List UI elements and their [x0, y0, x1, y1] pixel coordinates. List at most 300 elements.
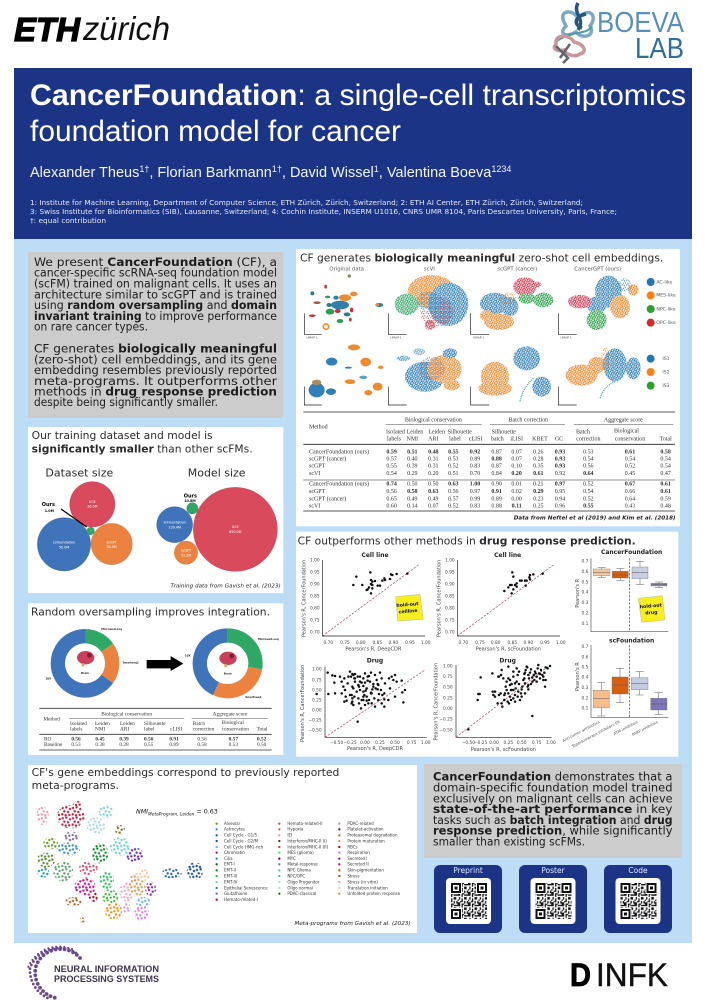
- authors: Alexander Theus: [30, 165, 139, 181]
- legend: Secreted I: [347, 856, 368, 861]
- chart: cell line vs DeepCDR: 0.90: [389, 640, 398, 646]
- table: oversampling metrics: correction: [193, 727, 215, 733]
- QR card: Preprint: [434, 865, 502, 933]
- legend: Protein maturation: [347, 838, 385, 843]
- chart: drug vs DeepCDR: [300, 657, 431, 752]
- chart: cell line vs scFoundation: 0.90: [445, 582, 455, 588]
- chart: drug vs DeepCDR: 1.00: [421, 740, 431, 746]
- table rows: first dataset: 0.55: [448, 449, 459, 455]
- panel: conclusion: exclusively on malignant cells can achieve: [433, 792, 673, 805]
- table rows: first dataset: 0.52: [448, 464, 459, 470]
- panel: introduction: cancer-specific scRNA-seq foundation model: [34, 267, 277, 280]
- table rows: second dataset: 0.97: [470, 489, 480, 495]
- table rows: first dataset: 0.64: [583, 471, 594, 477]
- table: integration metrics: Biological: [614, 428, 639, 434]
- affiliations: †: equal contribution: [30, 217, 106, 225]
- legend: Alveolar: [224, 821, 241, 826]
- table rows: second dataset: 0.63: [448, 482, 459, 488]
- chart: drug vs DeepCDR: 0.75: [407, 740, 417, 746]
- affiliations: 1: Institute for Machine Learning, Department of Computer Science, ETH Zürich, Zürich, Switzerland; 2: ETH AI Center, ETH Zürich, Zürich, Switzerland;: [30, 199, 583, 207]
- chart: donut before: [45, 627, 139, 690]
- table: oversampling metrics: Leiden: [120, 721, 135, 727]
- table rows: second dataset: 1.00: [470, 482, 480, 488]
- chart: drug vs DeepCDR: 1.00: [312, 667, 322, 673]
- chart: cell line vs scFoundation: 0.95: [445, 570, 455, 576]
- legend: Hemato-related-II: [287, 821, 323, 826]
- table: integration metrics: Silhouette: [448, 430, 472, 436]
- chart: box plot scFoundation: 0.1: [581, 706, 589, 712]
- table rows: second dataset: 0.14: [407, 504, 418, 510]
- table rows: second dataset: 0.97: [555, 482, 565, 488]
- chart: model size bubbles: 650.0M: [229, 530, 242, 534]
- header banner: [14, 68, 692, 239]
- sticky note: hold-out cellline: cellline: [398, 608, 418, 616]
- table rows: first dataset: 0.93: [555, 457, 565, 463]
- authors: 1: [374, 164, 379, 174]
- chart: box plot scFoundation: 0.5: [581, 664, 589, 670]
- legend: Cell Cycle - G1/S: [224, 833, 258, 838]
- chart: box plot scFoundation: Topoisomerase inhibitors I/II: [570, 719, 620, 749]
- table rows: second dataset: 0.61: [660, 489, 671, 495]
- chart: cell line vs scFoundation: 0.85: [508, 640, 517, 646]
- table rows: first dataset: 0.07: [511, 449, 522, 455]
- legend: Unfolded protein response: [347, 891, 401, 896]
- chart: dataset size bubbles: 36.0M: [87, 505, 98, 509]
- table rows: second dataset: 0.49: [428, 496, 439, 502]
- chart: box plot scFoundation: PARP inhibitors: [631, 719, 659, 737]
- chart: dataset size bubbles: [37, 467, 132, 571]
- panel: conclusion: domain-specific foundation model trained: [433, 782, 672, 794]
- logo: NeurIPS: PROCESSING SYSTEMS: [54, 974, 159, 985]
- chart: box plot scFoundation: 0.7: [581, 644, 589, 650]
- heading: meta-programs.: [32, 780, 119, 792]
- table: oversampling metrics: 0.53: [229, 742, 238, 748]
- chart: drug vs scFoundation: 0.00: [489, 740, 499, 746]
- table: integration metrics: batch: [491, 437, 504, 443]
- legend: Interferon/MHC-II (I): [287, 838, 327, 843]
- table rows: first dataset: CancerFoundation (ours): [309, 448, 369, 455]
- table rows: second dataset: 0.90: [491, 482, 502, 488]
- arrow: [147, 656, 183, 671]
- table rows: second dataset: 0.63: [428, 489, 439, 495]
- panel: introduction: We present CancerFoundation (CF), a: [34, 256, 277, 269]
- legend: IEI: [287, 833, 292, 838]
- legend: EMT-III: [224, 873, 237, 878]
- table: integration metrics: Silhouette: [492, 430, 516, 436]
- table rows: first dataset: 0.61: [625, 449, 635, 455]
- panel: introduction: despite being significantly smaller.: [34, 396, 218, 409]
- panel: conclusion: state-of-the-art performance in key: [433, 803, 673, 816]
- table: oversampling metrics: ARI: [120, 727, 129, 733]
- table rows: second dataset: 0.52: [583, 482, 594, 488]
- panel: cell embeddings: [296, 249, 680, 526]
- table: integration metrics: labels: [387, 437, 402, 443]
- table: integration metrics: correction: [576, 437, 600, 443]
- chart: box plot CancerFoundation: [575, 549, 668, 632]
- sticky note: hold-out cellline: hold-out: [396, 601, 420, 609]
- table rows: first dataset: 0.92: [555, 471, 565, 477]
- chart: dataset size bubbles: UCE: [89, 500, 96, 504]
- panel: conclusion: tasks such as batch integration and drug: [433, 814, 672, 827]
- chart: box plot scFoundation: 0.2: [581, 695, 589, 701]
- table rows: first dataset: 0.07: [511, 457, 522, 463]
- chart: drug vs scFoundation: 0.50: [517, 740, 527, 746]
- table: integration metrics: label: [449, 437, 461, 443]
- table rows: first dataset: 0.93: [555, 449, 565, 455]
- chart: model size bubbles: 10.8M: [184, 499, 196, 503]
- chart: drug vs scFoundation: 1.00: [546, 740, 556, 746]
- panel: introduction: architecture similar to scGPT and is trained: [34, 288, 277, 301]
- authors: 1234: [491, 164, 511, 174]
- heading: CF generates biologically meaningful zero-shot cell embeddings.: [300, 252, 663, 265]
- title: CancerFoundation: a single-cell transcriptomics: [30, 79, 686, 112]
- panel: introduction: on rare cancer types.: [34, 321, 148, 334]
- chart: box plot scFoundation: Pearson's R: [575, 662, 581, 691]
- logo: NeurIPS: NEURAL INFORMATION: [54, 964, 159, 975]
- chart: cell line vs DeepCDR: 0.70: [324, 640, 333, 646]
- chart: cell line vs DeepCDR: 0.70: [310, 630, 320, 636]
- table rows: second dataset: 0.48: [660, 504, 671, 510]
- chart: drug vs scFoundation: 0.50: [443, 685, 453, 691]
- table rows: second dataset: 0.11: [512, 504, 522, 510]
- chart: donut before: Brain: [81, 671, 89, 675]
- chart: drug vs DeepCDR: −0.25: [308, 718, 322, 724]
- table rows: first dataset: 0.26: [533, 449, 544, 455]
- authors: 1†: [139, 164, 149, 174]
- chart: drug vs scFoundation: Pearson's R, scFoundation: [471, 747, 536, 753]
- table: oversampling metrics: Batch: [193, 721, 205, 727]
- chart: dataset size bubbles: scFoundation: [53, 541, 75, 545]
- logo: NeurIPS: [27, 947, 159, 999]
- legend: cell types: [647, 278, 676, 327]
- legend: EMT-I: [224, 862, 235, 867]
- chart: cell line vs DeepCDR: 0.80: [356, 640, 366, 646]
- QR card: Poster: [519, 865, 587, 933]
- legend: Epithelial Senescence: [224, 885, 268, 890]
- chart: cell line vs scFoundation: 1.00: [445, 558, 455, 564]
- chart: drug vs scFoundation: Pearson's R, CancerFoundation: [433, 663, 439, 740]
- legend: Hypoxia: [287, 827, 304, 832]
- table rows: first dataset: [309, 448, 671, 477]
- table rows: second dataset: 0.66: [625, 489, 635, 495]
- table rows: first dataset: 0.52: [625, 464, 635, 470]
- chart: cell line vs DeepCDR: 0.80: [310, 606, 320, 612]
- legend: [215, 821, 401, 902]
- table rows: second dataset: 0.59: [660, 496, 671, 502]
- legend: cell types: AC-like: [656, 279, 672, 285]
- panel: conclusion: smaller than existing scFMs.: [433, 836, 585, 848]
- umap column titles: Original data: [329, 267, 364, 273]
- umap column titles: CancerGPT (ours): [574, 267, 621, 273]
- chart: box plot CancerFoundation: 0.1: [581, 621, 589, 627]
- table rows: second dataset: 0.91: [491, 489, 502, 495]
- table: integration metrics: GC: [555, 437, 563, 443]
- chart: cell line vs scFoundation: Pearson's R, CancerFoundation: [437, 560, 443, 637]
- legend: Platelet-activation: [347, 827, 384, 832]
- table rows: first dataset: 0.47: [660, 471, 671, 477]
- chart: box plot CancerFoundation: 0.7: [581, 558, 589, 564]
- chart: drug vs DeepCDR: Pearson's R, DeepCDR: [347, 746, 403, 752]
- table: oversampling metrics: 0.39: [119, 736, 129, 742]
- table rows: first dataset: 0.55: [386, 464, 397, 470]
- QR card: Poster: Poster: [541, 866, 566, 875]
- panel: dataset and model size: [28, 427, 283, 593]
- table: oversampling metrics: Total: [257, 727, 268, 733]
- table: oversampling metrics: cLISI: [170, 727, 182, 733]
- title: foundation model for cancer: [30, 115, 401, 148]
- chart: box plot scFoundation: 0.6: [581, 654, 589, 660]
- chart: dataset size bubbles: 30.0M: [107, 545, 117, 549]
- chart: drug vs DeepCDR: 0.50: [390, 740, 400, 746]
- chart: box plot CancerFoundation: 0.5: [581, 579, 589, 585]
- authors: , Florian Barkmann: [149, 165, 272, 181]
- legend: cell types: OPC-like: [656, 320, 676, 326]
- table rows: second dataset: 0.21: [533, 482, 544, 488]
- chart: cell line vs DeepCDR: 0.95: [405, 640, 415, 646]
- table: integration metrics: Method: [309, 424, 328, 430]
- chart: cell line vs DeepCDR: 0.75: [310, 618, 320, 624]
- chart: model size bubbles: UCE: [232, 525, 239, 529]
- table: integration metrics: Leiden: [428, 430, 445, 436]
- table rows: first dataset: scGPT: [309, 464, 326, 470]
- chart: cell line vs DeepCDR: 0.85: [310, 594, 320, 600]
- table rows: first dataset: 0.39: [407, 464, 418, 470]
- table rows: first dataset: 0.51: [407, 449, 418, 455]
- chart: donut after: Brain: [224, 672, 232, 676]
- chart: dataset size bubbles: 1.0M: [45, 509, 54, 513]
- table rows: second dataset: 0.49: [407, 496, 418, 502]
- chart: box plot CancerFoundation: Pearson's R: [575, 578, 581, 608]
- table rows: second dataset: 0.52: [448, 504, 459, 510]
- table rows: second dataset: 0.50: [428, 482, 439, 488]
- logo: D-INFK: D: [570, 957, 591, 993]
- table: oversampling metrics: Leiden: [95, 721, 110, 727]
- table rows: first dataset: 0.10: [511, 464, 522, 470]
- chart: cell line vs scFoundation: 0.70: [459, 640, 468, 646]
- chart: drug vs scFoundation: [433, 657, 556, 753]
- table: integration metrics: Total: [660, 437, 672, 443]
- chart: model size bubbles: 51.3M: [181, 553, 191, 557]
- table rows: first dataset: scGPT (cancer): [309, 456, 346, 463]
- table rows: second dataset: 0.58: [407, 489, 418, 495]
- metric label: NMI: [136, 809, 148, 816]
- table rows: first dataset: 0.45: [625, 471, 635, 477]
- chart: drug vs scFoundation: 0.00: [443, 706, 453, 712]
- table: oversampling metrics: 0.53: [71, 742, 81, 748]
- chart: dataset size bubbles: 50.0M: [59, 545, 69, 549]
- table: integration metrics: [303, 412, 675, 511]
- table rows: first dataset: 0.40: [407, 457, 418, 463]
- table rows: second dataset: scGPT: [309, 489, 326, 495]
- chart: cell line vs DeepCDR: 0.75: [340, 640, 350, 646]
- table rows: first dataset: 0.92: [470, 449, 480, 455]
- legend: datasets: IS2: [662, 369, 670, 375]
- chart: cell line vs DeepCDR: Cell line: [361, 552, 389, 559]
- legend: NPC/OPC: [287, 873, 305, 878]
- table: integration metrics: NMI: [407, 437, 418, 443]
- metric label: = 0.63: [194, 809, 218, 816]
- chart: cell line vs DeepCDR: 1.00: [310, 558, 320, 564]
- chart: drug vs DeepCDR: 0.25: [312, 698, 322, 704]
- table rows: first dataset: 0.87: [491, 464, 502, 470]
- chart: donut after: [185, 635, 279, 699]
- chart: drug vs scFoundation: 0.75: [532, 740, 542, 746]
- table: oversampling metrics: NMI: [95, 727, 106, 733]
- table: oversampling metrics: 0.58: [197, 742, 207, 748]
- table rows: second dataset: 0.94: [555, 496, 565, 502]
- table: integration metrics: iLISI: [510, 437, 523, 443]
- table rows: second dataset: 0.25: [533, 504, 544, 510]
- table rows: second dataset: 0.61: [660, 482, 671, 488]
- table: integration metrics: ARI: [428, 437, 438, 443]
- chart: umap scatter row 1: UMAP 1: [560, 335, 572, 339]
- table: oversampling metrics: conservation: [222, 727, 249, 733]
- heading: [32, 767, 339, 792]
- table: oversampling metrics: Silhouette: [144, 721, 166, 727]
- chart: cell line vs scFoundation: Pearson's R, scFoundation: [476, 646, 541, 652]
- panel: introduction: CF generates biologically meaningful: [34, 343, 277, 356]
- table rows: first dataset: 0.57: [386, 457, 397, 463]
- panel: gene embeddings: [28, 765, 417, 933]
- table rows: second dataset: CancerFoundation (ours): [309, 481, 369, 488]
- chart: dataset size bubbles: Ours: [42, 502, 55, 508]
- chart: umap scatter row 1: UMAP 1: [390, 335, 402, 339]
- chart: drug vs scFoundation: 1.00: [443, 663, 453, 669]
- chart: gene embedding scatter: [37, 801, 203, 923]
- table: oversampling metrics: 0.56: [71, 736, 81, 742]
- table rows: second dataset: 0.88: [491, 504, 502, 510]
- table rows: first dataset: 0.20: [511, 471, 522, 477]
- legend: Oligo Progenitor: [287, 879, 320, 884]
- table: oversampling metrics: Isolated: [70, 721, 87, 727]
- logo: Boeva Lab: [554, 3, 685, 65]
- table rows: first dataset: 0.54: [660, 457, 671, 463]
- chart: cell line vs scFoundation: [437, 552, 566, 652]
- authors: , David Wissel: [282, 165, 374, 181]
- panel: introduction: invariant training to improve performance: [34, 310, 277, 323]
- chart: cell line vs DeepCDR: 0.95: [310, 570, 320, 576]
- chart: umap scatter row 1: UMAP 1: [306, 335, 318, 339]
- table rows: first dataset: 0.51: [448, 471, 459, 477]
- table: oversampling metrics: 0.56: [144, 736, 154, 742]
- chart: drug vs scFoundation: Drug: [499, 657, 516, 664]
- panel: drug response: [296, 532, 678, 757]
- chart: box plot CancerFoundation: CancerFoundation: [601, 549, 662, 556]
- table: oversampling metrics: 0.38: [95, 742, 105, 748]
- legend: Secreted II: [347, 862, 369, 867]
- table rows: first dataset: 0.93: [555, 464, 565, 470]
- legend: datasets: IS1: [662, 356, 670, 362]
- chart: drug vs scFoundation: 0.75: [443, 674, 453, 680]
- table rows: second dataset: 0.83: [470, 504, 480, 510]
- chart: cell line vs DeepCDR: 0.85: [373, 640, 382, 646]
- table: oversampling metrics: 0.89: [169, 742, 179, 748]
- legend: Astrocytes: [224, 827, 245, 832]
- table rows: first dataset: 0.31: [428, 464, 439, 470]
- sticky note: hold-out cellline: [396, 594, 423, 621]
- chart: cell line vs scFoundation: 0.75: [475, 640, 485, 646]
- chart: model size bubbles: [157, 467, 277, 571]
- caption: Training data from Gavish et al. (2023): [170, 583, 281, 589]
- table rows: first dataset: 0.35: [533, 464, 544, 470]
- table rows: second dataset: 0.95: [555, 489, 565, 495]
- legend: Chromatin: [224, 850, 245, 855]
- table rows: first dataset: 0.84: [491, 471, 502, 477]
- legend: MYC: [287, 856, 296, 861]
- chart: model size bubbles: scGPT: [181, 549, 192, 553]
- chart: model size bubbles: scFoundation: [164, 521, 186, 525]
- logo: ETH Zurich: zürich: [82, 10, 170, 47]
- QR card: Preprint: Preprint: [453, 866, 483, 875]
- chart: drug vs DeepCDR: −0.50: [308, 728, 322, 734]
- table rows: second dataset: 0.23: [533, 496, 544, 502]
- table: oversampling metrics: 0.55: [144, 742, 154, 748]
- table: integration metrics: Batch correction: [508, 418, 548, 424]
- table: oversampling metrics: label: [144, 727, 155, 733]
- table rows: first dataset: 0.20: [428, 471, 439, 477]
- chart: dataset size bubbles: Dataset size: [45, 467, 113, 480]
- table rows: first dataset: 0.53: [583, 449, 594, 455]
- table rows: second dataset: 0.96: [555, 504, 565, 510]
- chart: cell line vs DeepCDR: Pearson's R, CancerFoundation: [302, 560, 308, 637]
- table rows: first dataset: 0.48: [428, 449, 439, 455]
- table rows: first dataset: 0.59: [386, 449, 397, 455]
- icon: protein helix: [554, 3, 593, 63]
- table: oversampling metrics: Biological: [222, 720, 244, 726]
- chart: box plot scFoundation: Anti-tumor antibiotics: [561, 719, 600, 743]
- sticky note: hold-out drug: drug: [645, 610, 658, 617]
- light blue poster background: [14, 239, 692, 943]
- QR card: Code: [604, 865, 672, 933]
- table rows: first dataset: 0.54: [583, 457, 594, 463]
- table rows: second dataset: 0.89: [491, 496, 502, 502]
- table: oversampling metrics: RO: [44, 736, 52, 742]
- table rows: second dataset: 0.07: [428, 504, 439, 510]
- chart: umap scatter row 1: UMAP 1: [473, 335, 485, 339]
- affiliations: 3: Swiss Institute for Bioinformatics (SIB), Lausanne, Switzerland; 4: Cochin Institute, INSERM U1016, CNRS UMR 8104, Paris Descartes University, Paris, France;: [30, 208, 617, 216]
- chart: drug vs DeepCDR: 0.50: [312, 687, 322, 693]
- panel: conclusion: response prediction , while significantly: [433, 825, 673, 838]
- chart: cell line vs DeepCDR: Pearson's R, DeepCDR: [345, 646, 402, 652]
- logo: ETH Zurich: ETH: [14, 11, 81, 48]
- legend: Cell Cycle HMG-rich: [224, 844, 264, 849]
- panel: introduction: meta-programs. It outperforms other: [34, 375, 277, 388]
- table rows: second dataset: [309, 481, 671, 510]
- chart: model size bubbles: 139.4M: [168, 525, 181, 529]
- table rows: second dataset: 0.00: [511, 496, 522, 502]
- heading: Random oversampling improves integration.: [31, 606, 270, 619]
- table: integration metrics: Aggregate score: [604, 418, 643, 424]
- legend: MES (glioma): [287, 850, 314, 855]
- authors: , Valentina Boeva: [379, 165, 492, 181]
- table: oversampling metrics: labels: [70, 727, 82, 733]
- chart: drug vs DeepCDR: 0.00: [312, 708, 322, 714]
- QR card: Code: Code: [628, 866, 648, 875]
- table rows: first dataset: 0.28: [533, 457, 544, 463]
- chart: drug vs DeepCDR: Drug: [367, 657, 383, 664]
- chart: cell line vs DeepCDR: 0.90: [310, 582, 320, 588]
- table rows: second dataset: 0.29: [533, 489, 544, 495]
- table: oversampling metrics: Method: [43, 717, 60, 723]
- legend: EMT-II: [224, 868, 236, 873]
- panel: random oversampling: [28, 603, 283, 755]
- table rows: first dataset: 0.53: [448, 457, 459, 463]
- table rows: second dataset: 0.64: [625, 496, 635, 502]
- chart: drug vs DeepCDR: −0.50: [330, 740, 344, 746]
- table rows: first dataset: 0.54: [386, 471, 397, 477]
- chart: box plot CancerFoundation: 0.4: [581, 590, 589, 596]
- chart: drug vs scFoundation: 0.25: [504, 740, 513, 746]
